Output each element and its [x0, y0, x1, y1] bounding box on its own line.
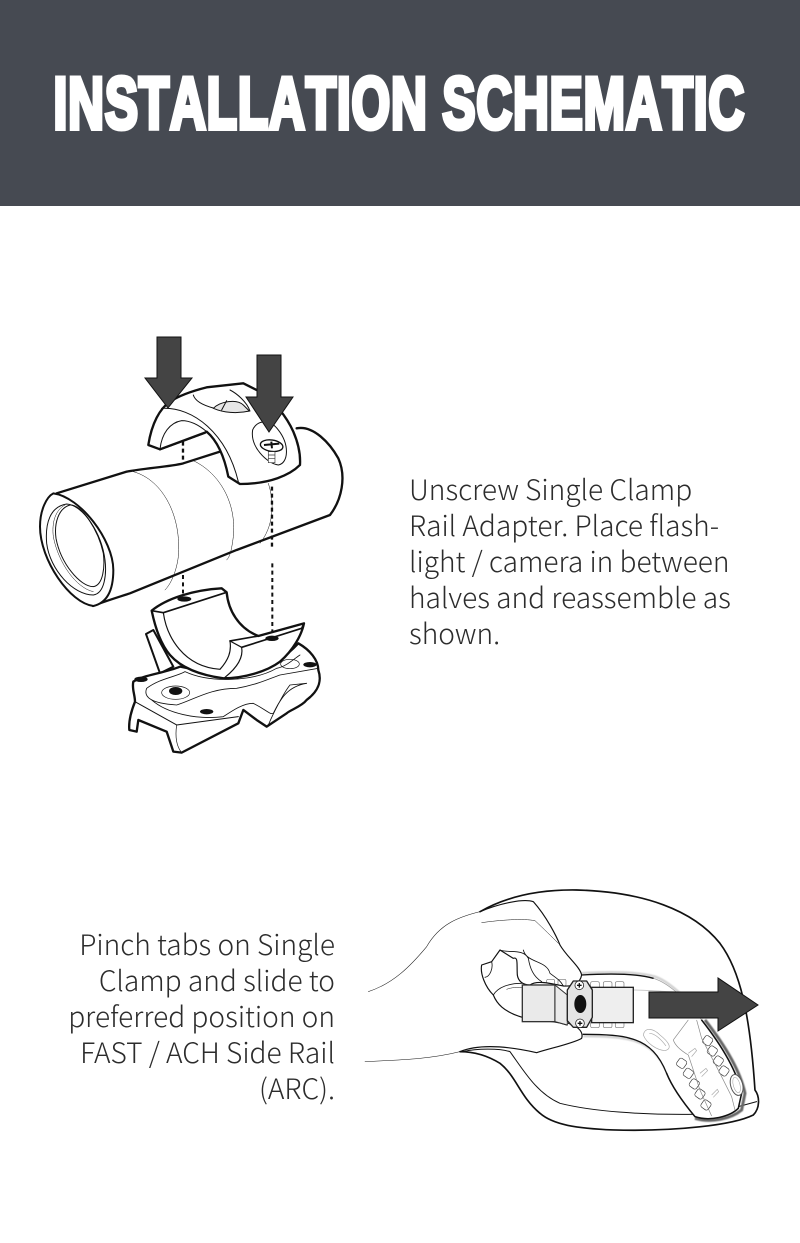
text: step 1 instructions: halves and reassemble as — [409, 576, 731, 617]
side rail — [547, 972, 745, 1120]
helmet shell — [460, 890, 759, 1130]
text: step 1 instructions: light / camera in between — [409, 540, 730, 581]
text: step 2 instructions: FAST / ACH Side Rail — [80, 1031, 335, 1072]
title banner — [0, 0, 800, 206]
text: step 2 instructions: Clamp and slide to — [99, 959, 335, 1000]
text: step 1 instructions — [409, 468, 731, 653]
flashlight lens — [40, 493, 113, 606]
text: step 2 instructions — [68, 923, 335, 1108]
flashlight body — [57, 428, 342, 606]
clamp sleeve and plate — [522, 981, 633, 1028]
hand gripping clamp — [365, 901, 582, 1062]
arrow: left down — [145, 337, 192, 408]
text: step 1 instructions: Unscrew Single Clamp — [409, 468, 692, 509]
arrow: slide right — [649, 978, 758, 1031]
text: step 2 instructions: Pinch tabs on Single — [79, 923, 335, 964]
text: step 2 instructions: (ARC). — [259, 1067, 335, 1108]
upper clamp half — [148, 383, 300, 484]
text: step 1 instructions: Rail Adapter. Place flash- — [409, 504, 719, 545]
text: step 2 instructions: preferred position on — [68, 995, 335, 1036]
rail mount base with lower clamp half — [129, 563, 320, 753]
arrow: right down — [246, 355, 293, 432]
title: INSTALLATION SCHEMATIC — [54, 63, 745, 145]
text: step 1 instructions: shown. — [409, 612, 500, 653]
rail lower section detail — [643, 1020, 745, 1116]
